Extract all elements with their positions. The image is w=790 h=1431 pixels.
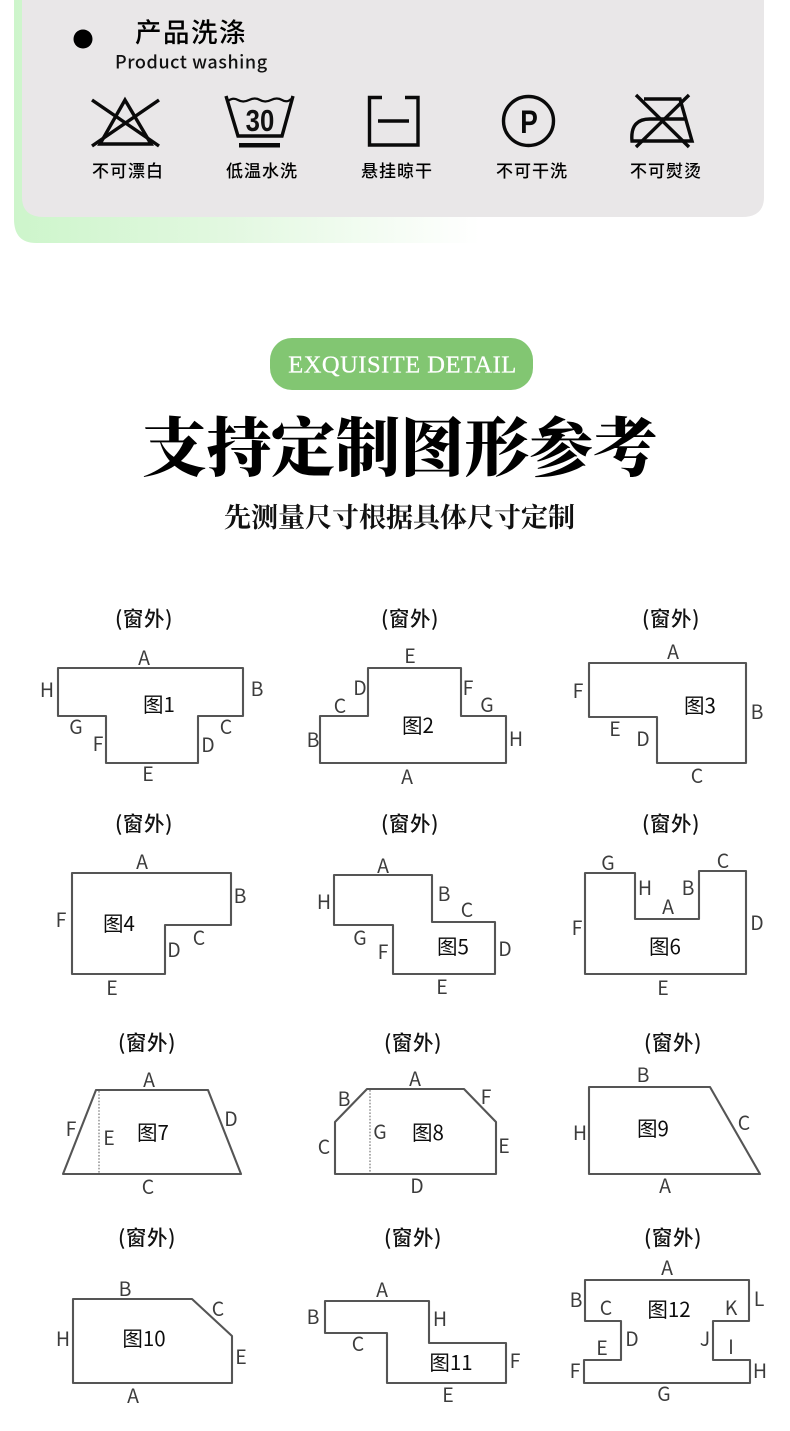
figure 8: F xyxy=(481,1081,492,1110)
figure 7: D xyxy=(224,1103,238,1132)
heading: product washing: 产品洗涤 xyxy=(135,11,247,50)
figure 6 xyxy=(572,807,764,1001)
figure 5: C xyxy=(461,894,473,923)
figure 10: A xyxy=(127,1380,139,1409)
subheading: Product washing: Product washing xyxy=(115,48,268,74)
figure 5 xyxy=(317,807,512,1000)
figure 6: C xyxy=(717,845,729,874)
figure 4: A xyxy=(136,846,148,875)
figure 7 xyxy=(63,1026,241,1200)
figure 8: 图8 xyxy=(412,1116,444,1146)
figure 4: (窗外) xyxy=(115,807,173,837)
icon: do not bleach xyxy=(92,100,159,146)
figure 6: H xyxy=(638,872,652,901)
figure 9: C xyxy=(738,1107,750,1136)
figure 3 xyxy=(573,602,763,789)
figure 9: H xyxy=(573,1117,587,1146)
figure 11: H xyxy=(433,1303,447,1332)
subtitle: 先测量尺寸根据具体尺寸定制 xyxy=(224,496,575,535)
figure 2: D xyxy=(353,672,367,701)
figure 10 xyxy=(56,1221,247,1409)
figure 8: D xyxy=(410,1170,424,1199)
icon: no tumble dry P xyxy=(504,96,554,146)
figure 8: G xyxy=(373,1116,387,1145)
figure 4 xyxy=(56,807,246,1001)
figure 5: D xyxy=(498,933,512,962)
figure 12: I xyxy=(728,1331,734,1360)
figure 7: (窗外) xyxy=(118,1026,176,1056)
figure 12: E xyxy=(596,1332,608,1361)
figure 6: 图6 xyxy=(649,930,681,960)
figure 7: 图7 xyxy=(137,1116,169,1146)
figure 10: E xyxy=(235,1341,247,1370)
figure 2: F xyxy=(463,672,474,701)
icon: no tumble dry P: P xyxy=(520,104,538,141)
figure 10: C xyxy=(212,1293,224,1322)
label: do not dry clean: 不可干洗 xyxy=(496,157,568,182)
figure 2 xyxy=(307,602,523,790)
figure 11: E xyxy=(442,1379,454,1408)
panel: product washing xyxy=(22,0,764,217)
figure 12: 图12 xyxy=(647,1293,691,1323)
figure 12: B xyxy=(570,1284,582,1313)
figure 4: B xyxy=(234,880,246,909)
figure 1 xyxy=(40,602,263,787)
figure 9: A xyxy=(659,1170,671,1199)
figure 1: A xyxy=(138,642,150,671)
figure 3: E xyxy=(609,713,621,742)
figure 2: H xyxy=(509,723,523,752)
figure 8: (窗外) xyxy=(384,1026,442,1056)
figure 6: B xyxy=(682,872,694,901)
figure 8: C xyxy=(318,1131,330,1160)
figure 3: D xyxy=(636,723,650,752)
figure 1: G xyxy=(69,711,83,740)
figure 2: A xyxy=(401,761,413,790)
figure 4: C xyxy=(193,922,205,951)
figure 3: C xyxy=(691,760,703,789)
figure 12: D xyxy=(625,1323,639,1352)
figure 11: A xyxy=(376,1274,388,1303)
figure 8 xyxy=(318,1026,510,1199)
figure 8: E xyxy=(498,1130,510,1159)
figure 7: E xyxy=(103,1122,115,1151)
figure 11: 图11 xyxy=(429,1346,473,1376)
figure 6: E xyxy=(657,972,669,1001)
figure 8: B xyxy=(338,1083,350,1112)
figure 8: A xyxy=(409,1063,421,1092)
figure 9: 图9 xyxy=(637,1112,669,1142)
panel: green backing card xyxy=(14,0,480,243)
figure 11: C xyxy=(352,1328,364,1357)
label: hang to dry: 悬挂晾干 xyxy=(361,157,433,182)
figure 12: J xyxy=(700,1323,710,1352)
figure 6: (窗外) xyxy=(642,807,700,837)
figure 1: 图1 xyxy=(143,688,175,718)
figure 2: B xyxy=(307,724,319,753)
figure 1: D xyxy=(201,729,215,758)
figure 12: (窗外) xyxy=(644,1221,702,1251)
figure 9: (窗外) xyxy=(644,1026,702,1056)
figure 2: 图2 xyxy=(402,709,434,739)
figure 5: 图5 xyxy=(437,930,469,960)
icon: low temperature wash: 30 xyxy=(246,104,274,137)
figure 5: E xyxy=(436,971,448,1000)
figure 6: D xyxy=(750,907,764,936)
figure 12: L xyxy=(754,1283,765,1312)
figure 5: (窗外) xyxy=(381,807,439,837)
figure 6: G xyxy=(601,847,615,876)
figure 12: C xyxy=(600,1292,612,1321)
figure 3: (窗外) xyxy=(642,602,700,632)
figure 10: H xyxy=(56,1323,70,1352)
figure 7: C xyxy=(142,1171,154,1200)
figure 11: (窗外) xyxy=(384,1221,442,1251)
badge: EXQUISITE DETAIL xyxy=(270,338,533,390)
figure 5: F xyxy=(378,936,389,965)
figure 12: F xyxy=(570,1355,581,1384)
label: low temperature wash: 低温水洗 xyxy=(226,157,298,182)
figure 7: F xyxy=(66,1113,77,1142)
figure 1: C xyxy=(220,711,232,740)
icon: hang to dry xyxy=(370,98,418,145)
figure 5: H xyxy=(317,886,331,915)
figure 6: A xyxy=(662,891,674,920)
figure 4: D xyxy=(167,934,181,963)
figure 1: E xyxy=(142,758,154,787)
figure 2: G xyxy=(480,689,494,718)
figure 1: H xyxy=(40,674,54,703)
figure 2: E xyxy=(404,640,416,669)
figure 11: F xyxy=(510,1345,521,1374)
figure 12: G xyxy=(657,1378,671,1407)
figure 12: A xyxy=(661,1252,673,1281)
figure 3: B xyxy=(751,696,763,725)
figure 3: F xyxy=(573,675,584,704)
figure 12: H xyxy=(753,1355,767,1384)
figure 11: B xyxy=(307,1301,319,1330)
figure 10: B xyxy=(119,1273,131,1302)
figure 3: A xyxy=(667,636,679,665)
figure 6: F xyxy=(572,912,583,941)
figure 1: B xyxy=(251,673,263,702)
figure 1: F xyxy=(93,728,104,757)
label: do not bleach: 不可漂白 xyxy=(92,157,164,182)
icon: section bullet xyxy=(74,30,92,48)
figure 4: E xyxy=(106,972,118,1001)
icon: low temperature wash xyxy=(226,96,293,148)
icon: do not iron xyxy=(632,95,692,147)
figure 3: 图3 xyxy=(684,689,716,719)
figure 5: B xyxy=(438,878,450,907)
figure 10: (窗外) xyxy=(118,1221,176,1251)
figure 5: A xyxy=(377,850,389,879)
figure 10: 图10 xyxy=(122,1322,166,1352)
figure 4: F xyxy=(56,904,67,933)
figure 4: 图4 xyxy=(103,907,135,937)
figure 7: A xyxy=(143,1064,155,1093)
title: 支持定制图形参考 xyxy=(142,398,658,490)
figure 5: G xyxy=(353,922,367,951)
label: do not iron: 不可熨烫 xyxy=(630,157,702,182)
figure 1: (窗外) xyxy=(115,602,173,632)
figure 12: K xyxy=(725,1292,738,1321)
figure 2: C xyxy=(334,690,346,719)
figure 9: B xyxy=(637,1059,649,1088)
badge: EXQUISITE DETAIL: EXQUISITE DETAIL xyxy=(288,352,517,378)
figure 11 xyxy=(307,1221,521,1408)
figure 2: (窗外) xyxy=(381,602,439,632)
figure 12 xyxy=(570,1221,767,1407)
figure 9 xyxy=(573,1026,760,1199)
